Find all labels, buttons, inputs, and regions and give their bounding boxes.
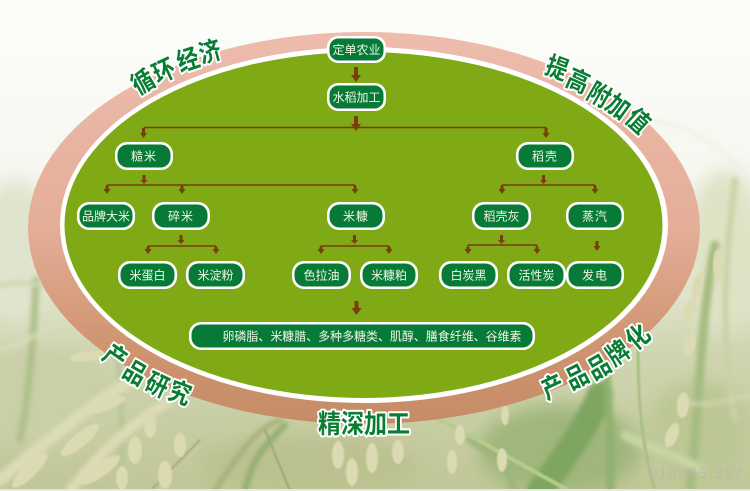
label: 产品研究: 究	[164, 376, 195, 411]
label: 循环经济	[127, 36, 225, 101]
label: 产品品牌化: 产	[537, 370, 570, 406]
node: 米淀粉	[186, 261, 245, 289]
node: 米糠粕: 米糠粕	[371, 268, 407, 282]
label: 提高附加值: 值	[619, 103, 655, 140]
node: 米糠粕	[360, 261, 418, 289]
label: 循环经济: 经	[173, 44, 203, 78]
node: 发电: 发电	[582, 268, 608, 282]
node: 米糠: 米糠	[343, 208, 369, 224]
node: 品牌大米	[77, 202, 135, 230]
label: 循环经济: 济	[196, 36, 225, 70]
node: deep-processing products	[189, 322, 535, 350]
node: 白炭黑: 白炭黑	[450, 268, 487, 282]
node: 白炭黑	[439, 261, 498, 289]
node: 色拉油	[292, 261, 351, 289]
label: 产品研究: 研	[140, 368, 173, 404]
node: 米糠	[327, 202, 385, 230]
node: 定单农业: 定单农业	[332, 42, 381, 57]
label: 产品研究	[97, 340, 195, 411]
node: 发电	[566, 261, 624, 289]
label: 提高附加值: 加	[600, 89, 635, 126]
node: 稻壳灰	[472, 202, 531, 230]
node: deep-processing products: 卵磷脂、米糠腊、多种多糖类、肌醇、膳食纤维、谷维素	[222, 328, 522, 344]
label: 产品品牌化: 牌	[601, 336, 636, 372]
watermark: 010085-397	[649, 465, 744, 482]
label: 循环经济: 循	[127, 65, 160, 101]
green central ellipse	[64, 52, 662, 398]
node: 蒸汽: 蒸汽	[582, 208, 608, 224]
label: 产品品牌化: 品	[561, 360, 594, 396]
node: 活性炭	[507, 261, 566, 289]
node: 定单农业	[327, 36, 386, 63]
label: 产品品牌化	[537, 319, 656, 406]
flow connectors and arrows	[104, 67, 600, 315]
label: 产品品牌化: 品	[583, 350, 616, 386]
node: 米蛋白: 米蛋白	[129, 268, 166, 282]
node: 色拉油: 色拉油	[303, 268, 340, 282]
node: 水稻加工	[327, 83, 386, 111]
white ring ellipse	[60, 47, 668, 403]
outer ring ellipse	[28, 32, 700, 424]
node: 稻壳: 稻壳	[532, 150, 558, 164]
label: 提高附加值: 提	[541, 51, 572, 86]
node: 米蛋白	[118, 261, 177, 289]
node: 稻壳	[516, 142, 574, 170]
label: 产品品牌化: 化	[621, 319, 656, 356]
label: 产品研究: 品	[118, 356, 151, 392]
node: 活性炭: 活性炭	[518, 268, 555, 282]
node: 碎米	[152, 202, 210, 230]
node: 碎米: 碎米	[168, 208, 194, 224]
label: 提高附加值: 高	[562, 64, 594, 100]
node: 水稻加工: 水稻加工	[332, 90, 381, 104]
node: 糙米: 糙米	[131, 150, 157, 164]
label: 提高附加值	[541, 51, 655, 140]
node: 糙米	[115, 142, 173, 170]
node: 蒸汽	[566, 202, 624, 230]
label: 循环经济: 环	[148, 54, 181, 90]
node: 稻壳灰: 稻壳灰	[483, 210, 520, 224]
label: 提高附加值: 附	[582, 78, 615, 114]
node: 米淀粉: 米淀粉	[197, 268, 234, 282]
label: 产品研究: 产	[97, 340, 132, 376]
label: 精深加工: 精深加工	[318, 409, 410, 439]
node: 品牌大米: 品牌大米	[82, 210, 130, 224]
